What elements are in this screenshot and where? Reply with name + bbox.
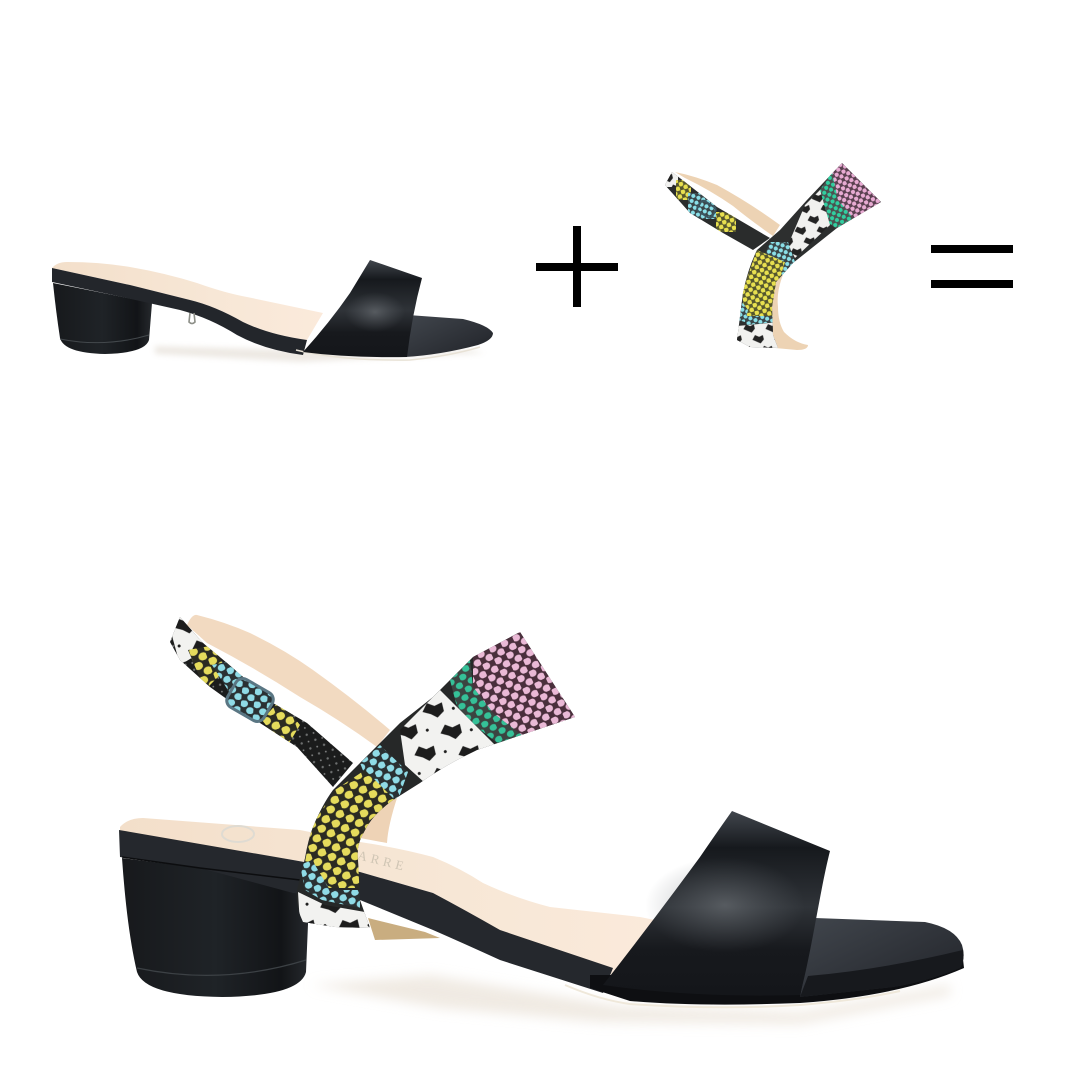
insole logo mark: ARRE xyxy=(356,847,409,874)
insole xyxy=(120,818,680,980)
plus sign xyxy=(536,226,618,307)
vamp strap xyxy=(303,260,422,357)
footbed rim xyxy=(52,268,307,355)
ground shadow xyxy=(155,346,485,362)
insole xyxy=(52,262,323,340)
assembled sandal with snake strap xyxy=(119,610,964,1024)
back strap snake print xyxy=(665,172,770,250)
charm xyxy=(189,313,195,324)
block heel xyxy=(53,283,152,354)
lining behind strap xyxy=(360,795,398,843)
buckle xyxy=(696,200,717,219)
buckle xyxy=(224,676,276,724)
interchangeable snake strap piece xyxy=(660,160,885,355)
vamp strap xyxy=(603,811,830,996)
strap tail under footbed xyxy=(368,918,440,940)
front strap snake print xyxy=(737,163,881,348)
sole line xyxy=(296,347,480,360)
back strap lining xyxy=(187,615,390,747)
front strap snake print xyxy=(297,632,575,928)
lower lining xyxy=(772,270,808,350)
slide sandal (black mule) xyxy=(52,260,493,362)
toe bed xyxy=(405,315,493,357)
footbed rim xyxy=(119,830,613,993)
ground shadow xyxy=(310,975,950,1024)
back strap snake print xyxy=(170,617,353,787)
back strap lining xyxy=(675,172,780,236)
block heel xyxy=(122,858,309,997)
toe bed xyxy=(800,918,964,997)
equals sign xyxy=(931,245,1013,288)
infographic canvas xyxy=(52,163,1013,1027)
insole logo mark xyxy=(222,826,409,874)
sole xyxy=(590,950,964,1005)
